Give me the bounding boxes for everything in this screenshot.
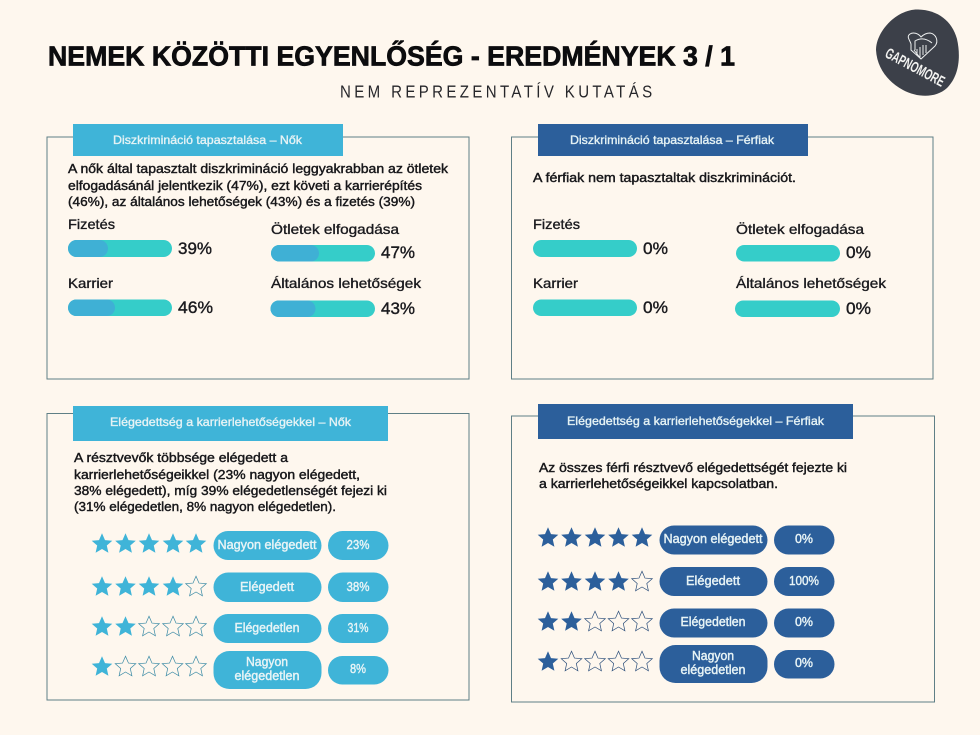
summary text: A nők által tapasztalt diszkrimináció leggyakrabban az ötletek [68, 161, 449, 176]
rating row: Nagyon elégedett 23%: 23% [346, 538, 370, 552]
rating row: Nagyon elégedetlen 8%: Nagyon [246, 655, 288, 669]
icon: heart with hand [908, 33, 937, 59]
rating row: Elégedetlen 0%: 0% [795, 615, 813, 629]
rating row: Elégedetlen 0% [538, 608, 834, 638]
summary text: (31% elégedetlen, 8% nagyon elégedetlen). [74, 499, 336, 514]
rating row: Nagyon elégedett 0%: 0% [795, 532, 813, 546]
summary text: Az összes férfi résztvevő elégedettségét fejezte ki [539, 460, 847, 475]
rating row: Elégedetlen 31%: Elégedetlen [234, 621, 300, 635]
summary text [539, 460, 847, 491]
header: discrimination men [538, 124, 808, 156]
summary text: a karrierlehetőségeikkel kapcsolatban. [539, 476, 778, 491]
bar: Általános lehetőségek 0%: Általános lehetőségek [736, 275, 887, 291]
rating row: Nagyon elégedett 23%: Nagyon elégedett [218, 538, 317, 552]
header: satisfaction men [538, 404, 853, 439]
header: discrimination women: Diszkrimináció tapasztalása – Nők [113, 133, 303, 147]
summary text: A résztvevők többsége elégedett a [74, 450, 289, 465]
title: NEMEK KÖZÖTTI EGYENLŐSÉG - EREDMÉNYEK 3 / 1 [48, 40, 735, 72]
rating row: Elégedett 38%: Elégedett [240, 580, 295, 594]
bar: Karrier 0%: Karrier [533, 275, 578, 291]
logo wordmark: GAPNOMORE [882, 45, 947, 91]
rating row: Elégedett 100%: Elégedett [686, 574, 741, 588]
rating row: Nagyon elégedetlen 8%: elégedetlen [234, 669, 300, 683]
rating row: Elégedett 100%: 100% [789, 574, 819, 588]
header: discrimination men: Diszkrimináció tapasztalása – Férfiak [570, 133, 775, 147]
bar: Ötletek elfogadása 0%: Ötletek elfogadása [736, 220, 864, 237]
rating row: Nagyon elégedetlen 0% [538, 645, 834, 683]
bar: Karrier 0% [533, 275, 668, 317]
summary text: 38% elégedett), míg 39% elégedetlenségét fejezi ki [74, 483, 387, 498]
bar: Fizetés 0% [533, 216, 668, 258]
summary text [74, 450, 387, 514]
panel: discrimination women [47, 124, 469, 379]
rating row: Nagyon elégedetlen 8% [92, 651, 388, 689]
summary text: (46%), az általános lehetőségek (43%) és a fizetés (39%) [68, 194, 415, 209]
rating row: Elégedetlen 0%: Elégedetlen [680, 615, 746, 629]
header: satisfaction women [73, 406, 388, 441]
bar: Fizetés 0%: 0% [643, 239, 668, 258]
bar: Fizetés 39%: 39% [178, 239, 212, 258]
rating row: Nagyon elégedett 0% [538, 526, 834, 554]
bar: Ötletek elfogadása 47% [271, 220, 415, 262]
rating row: Elégedett 38% [92, 572, 388, 602]
panel: satisfaction women [47, 406, 469, 700]
bar: Ötletek elfogadása 0% [736, 220, 871, 262]
bar: Fizetés 0%: Fizetés [533, 216, 580, 232]
bar: Általános lehetőségek 43% [270, 275, 422, 318]
summary text [68, 161, 449, 209]
bar: Karrier 46%: 46% [178, 298, 213, 317]
bar: Karrier 46%: Karrier [68, 275, 113, 291]
logo: GapNoMore badge [876, 9, 959, 96]
header: discrimination women [73, 124, 343, 156]
summary text: A férfiak nem tapasztaltak diszkriminációt. [533, 170, 796, 185]
bar: Általános lehetőségek 0% [735, 275, 887, 318]
summary text: elfogadásánál jelentkezik (47%), ezt követi a karrierépítés [68, 178, 423, 193]
rating row: Nagyon elégedett 23% [92, 531, 388, 560]
panel: satisfaction men [512, 404, 934, 702]
rating row: Elégedetlen 31% [92, 614, 388, 643]
rating row: Elégedetlen 31%: 31% [348, 621, 368, 635]
bar: Ötletek elfogadása 0%: 0% [846, 243, 871, 262]
header: satisfaction men: Elégedettség a karrierlehetőségekkel – Férfiak [567, 414, 825, 428]
bar: Általános lehetőségek 43%: Általános lehetőségek [271, 275, 422, 291]
bar: Karrier 46% [68, 275, 213, 317]
rating row: Elégedett 100% [538, 567, 834, 596]
bar: Fizetés 39%: Fizetés [68, 216, 115, 232]
rating row: Nagyon elégedetlen 0%: Nagyon [692, 649, 734, 663]
rating row: Nagyon elégedetlen 0%: 0% [795, 656, 813, 670]
bar: Fizetés 39% [68, 216, 212, 258]
rating row: Nagyon elégedetlen 8%: 8% [350, 662, 366, 676]
rating row: Nagyon elégedetlen 0%: elégedetlen [680, 663, 746, 677]
rating row: Nagyon elégedett 0%: Nagyon elégedett [664, 532, 763, 546]
bar: Általános lehetőségek 0%: 0% [846, 299, 871, 318]
subtitle: NEM REPREZENTATÍV KUTATÁS [340, 81, 652, 102]
rating row: Elégedett 38%: 38% [346, 580, 370, 594]
bar: Általános lehetőségek 43%: 43% [381, 299, 415, 318]
bar: Ötletek elfogadása 47%: Ötletek elfogadása [271, 220, 399, 237]
bar: Karrier 0%: 0% [643, 298, 668, 317]
bar: Ötletek elfogadása 47%: 47% [381, 243, 415, 262]
header: satisfaction women: Elégedettség a karrierlehetőségekkel – Nők [110, 415, 352, 429]
panel: discrimination men [512, 124, 933, 379]
summary text: karrierlehetőségeikkel (23% nagyon elégedett, [74, 467, 360, 482]
